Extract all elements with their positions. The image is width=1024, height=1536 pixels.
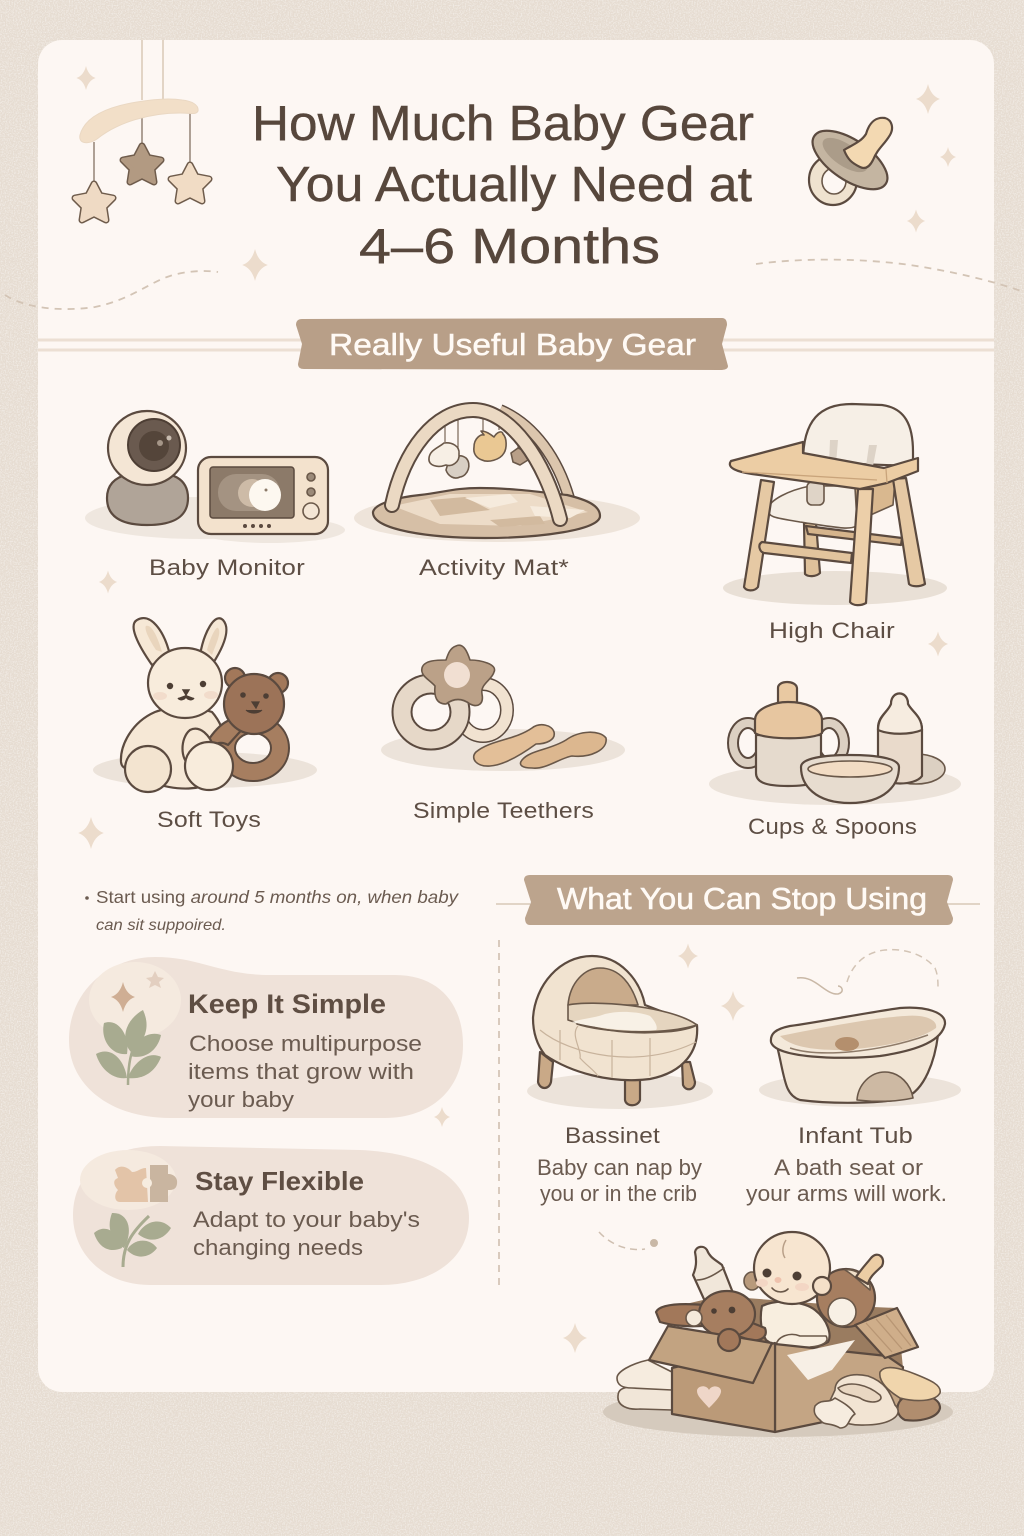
item: high chair [723, 404, 947, 605]
item: infant tub [759, 950, 961, 1107]
note paper [787, 1340, 855, 1380]
label: Cups and Spoons: Cups & Spoons [748, 814, 917, 839]
title [252, 97, 754, 274]
body: Keep It Simple [188, 1031, 422, 1112]
box left flap [649, 1326, 772, 1383]
icon: leaf sprig [94, 1213, 171, 1267]
panel: keep it simple [69, 957, 463, 1118]
icon: toy pacifier [817, 1255, 883, 1327]
item: simple teethers [381, 645, 625, 771]
description: Bassinet: Baby can nap by [537, 1155, 702, 1180]
footnote: Start using around 5 months on, when baby [96, 887, 459, 907]
body: Keep It Simple: your baby [188, 1087, 294, 1112]
body: Keep It Simple: items that grow with [188, 1059, 414, 1084]
dashed column divider [498, 940, 500, 1285]
footnote: can sit suppoired. [96, 917, 226, 934]
label: Activity Mat: Activity Mat* [419, 555, 569, 580]
footnote [85, 887, 459, 934]
body: Keep It Simple: Choose multipurpose [189, 1031, 422, 1056]
bear plush [656, 1291, 766, 1340]
illustration: baby in a box [603, 1232, 953, 1437]
icon: crib mobile [75, 40, 209, 220]
panel glow [89, 962, 181, 1038]
icon: puzzle pieces [114, 1165, 177, 1202]
box right face [775, 1344, 903, 1432]
bear paw [718, 1329, 740, 1351]
banner: Really Useful Baby Gear: Really Useful Baby Gear [329, 327, 696, 362]
label: Baby Monitor: Baby Monitor [149, 555, 305, 580]
description: Bassinet [537, 1155, 702, 1206]
icon: bottle [693, 1247, 735, 1308]
banner: What You Can Stop Using [496, 875, 980, 925]
panel: stay flexible [73, 1146, 469, 1285]
heart on box [697, 1386, 721, 1408]
title: 4–6 Months [359, 220, 660, 274]
label: Soft Toys: Soft Toys [157, 807, 261, 832]
description: Bassinet: you or in the crib [540, 1181, 697, 1206]
box left face [672, 1343, 775, 1432]
label: Simple Teethers: Simple Teethers [413, 798, 594, 823]
panel glow [80, 1150, 176, 1210]
body: Stay Flexible: Adapt to your baby's [193, 1207, 420, 1232]
icon: sparkle and star [111, 971, 164, 1012]
heading: Keep It Simple: Keep It Simple [188, 989, 386, 1019]
icon: pacifier [803, 118, 897, 205]
box back interior [660, 1296, 903, 1368]
icon: leaf sprig [96, 1010, 161, 1085]
body: Stay Flexible: changing needs [193, 1235, 363, 1260]
item: soft toys [93, 618, 317, 792]
body: Stay Flexible [193, 1207, 420, 1260]
description: Infant Tub: A bath seat or [774, 1155, 923, 1180]
title: How Much Baby Gear [252, 97, 754, 151]
item: baby monitor [85, 411, 345, 543]
banner: What You Can Stop Using: What You Can Stop Using [557, 881, 927, 916]
description: Infant Tub: your arms will work. [746, 1181, 947, 1206]
dashed flourish curves [5, 260, 1024, 309]
title: You Actually Need at [276, 158, 752, 212]
clothes pile [814, 1368, 940, 1428]
label: High Chair: High Chair [769, 618, 895, 643]
label: Infant Tub: Infant Tub [798, 1123, 913, 1148]
label: Bassinet: Bassinet [565, 1123, 660, 1148]
box right flap [855, 1308, 918, 1358]
section rule lines [38, 340, 994, 350]
decorative sparkles [76, 66, 956, 1353]
banner: Really Useful Baby Gear [296, 318, 728, 370]
item: activity mat [354, 410, 640, 542]
item: cups and spoons [709, 682, 961, 805]
folded towels [617, 1360, 672, 1410]
heading: Stay Flexible: Stay Flexible [195, 1166, 364, 1196]
dashed flourish with dot [599, 1232, 658, 1250]
baby [744, 1232, 831, 1349]
item: bassinet [527, 956, 713, 1109]
description: Infant Tub [746, 1155, 947, 1206]
